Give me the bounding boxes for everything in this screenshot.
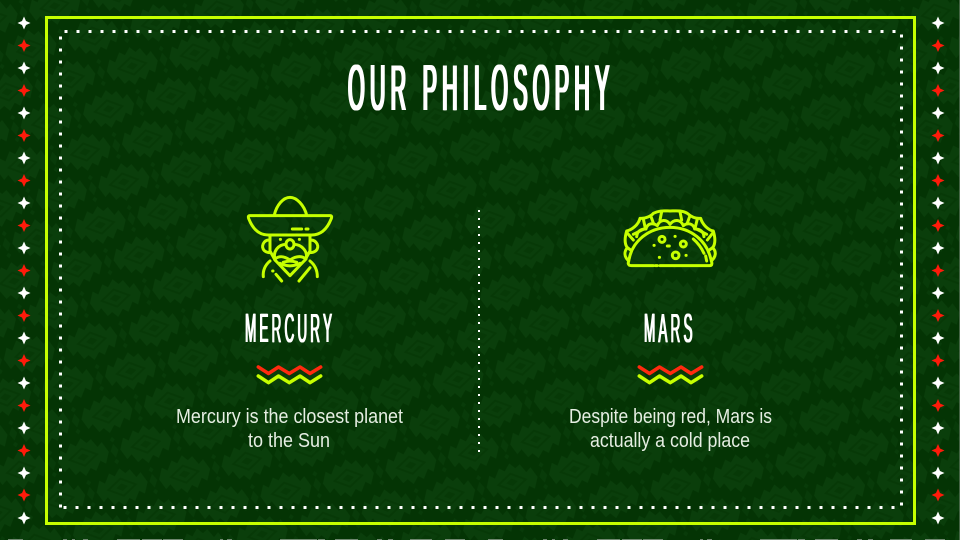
heading: Mars: MARS xyxy=(644,305,696,351)
icon: man with sombrero xyxy=(248,197,332,281)
zigzag divider: Mercury xyxy=(258,367,321,383)
center dotted divider xyxy=(478,210,480,453)
title: OUR PHILOSOPHY xyxy=(348,51,615,124)
dotted inner frame xyxy=(60,32,902,509)
text: Mars description: actually a cold place xyxy=(590,429,750,452)
zigzag divider: Mars xyxy=(639,367,702,383)
right star column xyxy=(932,16,944,524)
text: Mars description xyxy=(569,405,772,452)
text: Mars description: Despite being red, Mars is xyxy=(569,405,772,428)
icon: taco xyxy=(625,211,715,266)
left star column xyxy=(18,16,30,524)
text: Mercury description: Mercury is the closest planet xyxy=(176,405,403,428)
text: Mercury description xyxy=(176,405,403,452)
heading: Mercury: MERCURY xyxy=(245,305,335,351)
text: Mercury description: to the Sun xyxy=(248,429,330,452)
